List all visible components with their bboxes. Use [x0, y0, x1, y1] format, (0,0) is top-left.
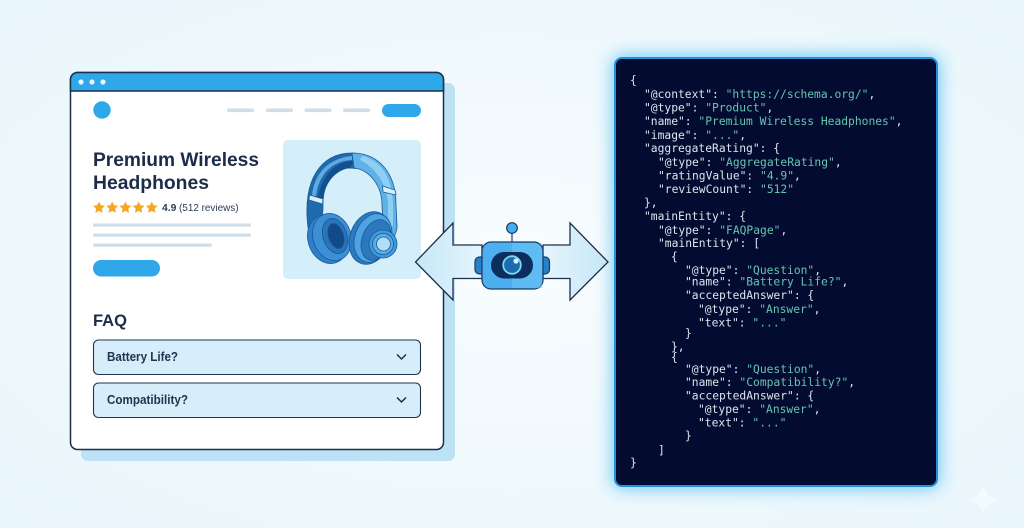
FAQ item: battery life [94, 340, 420, 374]
product title [93, 149, 259, 194]
navigation button [382, 104, 421, 117]
JSON code text: "@type": "Question", [685, 264, 821, 277]
right ear cup [342, 206, 398, 270]
headband, light side [352, 153, 397, 246]
rating text: 4.9 [162, 203, 177, 214]
FAQ item: compatibility [94, 383, 420, 418]
JSON code text: { [671, 250, 678, 264]
JSON code text: "mainEntity": { [644, 210, 746, 223]
icon: corner sparkle [966, 483, 1000, 517]
JSON code text: "@type": "Product", [644, 102, 773, 114]
JSON code text: "reviewCount": "512" [658, 183, 794, 196]
JSON code text: "@context": "https://schema.org/", [644, 88, 875, 101]
JSON code text: "image": "...", [644, 129, 746, 142]
icon: headphones [301, 153, 398, 270]
browser title bar [70, 72, 444, 91]
icon: robot [475, 223, 550, 289]
JSON code text: }, [671, 340, 685, 354]
FAQ item: battery life: Battery Life? [107, 350, 178, 364]
site logo [93, 101, 111, 119]
FAQ item: compatibility: Compatibility? [107, 393, 188, 407]
JSON code text: { [630, 74, 637, 87]
JSON code text: { [671, 351, 678, 364]
star rating [93, 202, 158, 213]
rating text: (512 reviews) [179, 203, 238, 214]
panel: product web page [70, 72, 455, 461]
headband sliders [309, 195, 323, 204]
JSON code text: "name": "Premium Wireless Headphones", [644, 115, 902, 128]
FAQ heading: FAQ [93, 312, 127, 330]
JSON code text: } [685, 327, 692, 340]
description lines [93, 224, 251, 247]
JSON code text: "mainEntity": [ [658, 237, 760, 250]
buy button [93, 260, 160, 276]
headband, dark side [307, 153, 358, 228]
product image tile [283, 140, 421, 279]
arrow: right, toward code [543, 223, 608, 300]
navigation bar placeholders [227, 108, 370, 112]
JSON code text: }, [644, 196, 658, 210]
JSON code text: "name": "Compatibility?", [685, 376, 855, 389]
JSON code text: "text": "..." [698, 416, 786, 430]
JSON code text: "text": "..." [698, 316, 786, 330]
JSON code text: "@type": "AggregateRating", [658, 156, 842, 169]
panel: JSON-LD code [613, 56, 939, 488]
JSON code text: "ratingValue": "4.9", [658, 170, 801, 182]
icon: chevron [397, 354, 406, 359]
left ear cup [301, 208, 357, 269]
JSON code text: "@type": "Question", [685, 363, 821, 376]
arrow: left, toward web page [416, 223, 482, 300]
product title: Headphones [93, 172, 209, 194]
JSON code text [630, 74, 902, 470]
JSON code text: ] [658, 444, 665, 457]
JSON code text: "@type": "Answer", [698, 403, 820, 416]
JSON code text: "acceptedAnswer": { [685, 390, 814, 402]
product title: Premium Wireless [93, 149, 259, 171]
JSON code text: } [630, 456, 637, 470]
JSON code text: "@type": "Answer", [698, 303, 820, 316]
icon: chevron [397, 398, 406, 402]
JSON code text: "@type": "FAQPage", [658, 224, 787, 237]
JSON code text: "name": "Battery Life?", [685, 276, 848, 288]
JSON code text: "aggregateRating": { [644, 142, 780, 155]
JSON code text: "acceptedAnswer": { [685, 289, 814, 302]
JSON code text: } [685, 430, 692, 442]
